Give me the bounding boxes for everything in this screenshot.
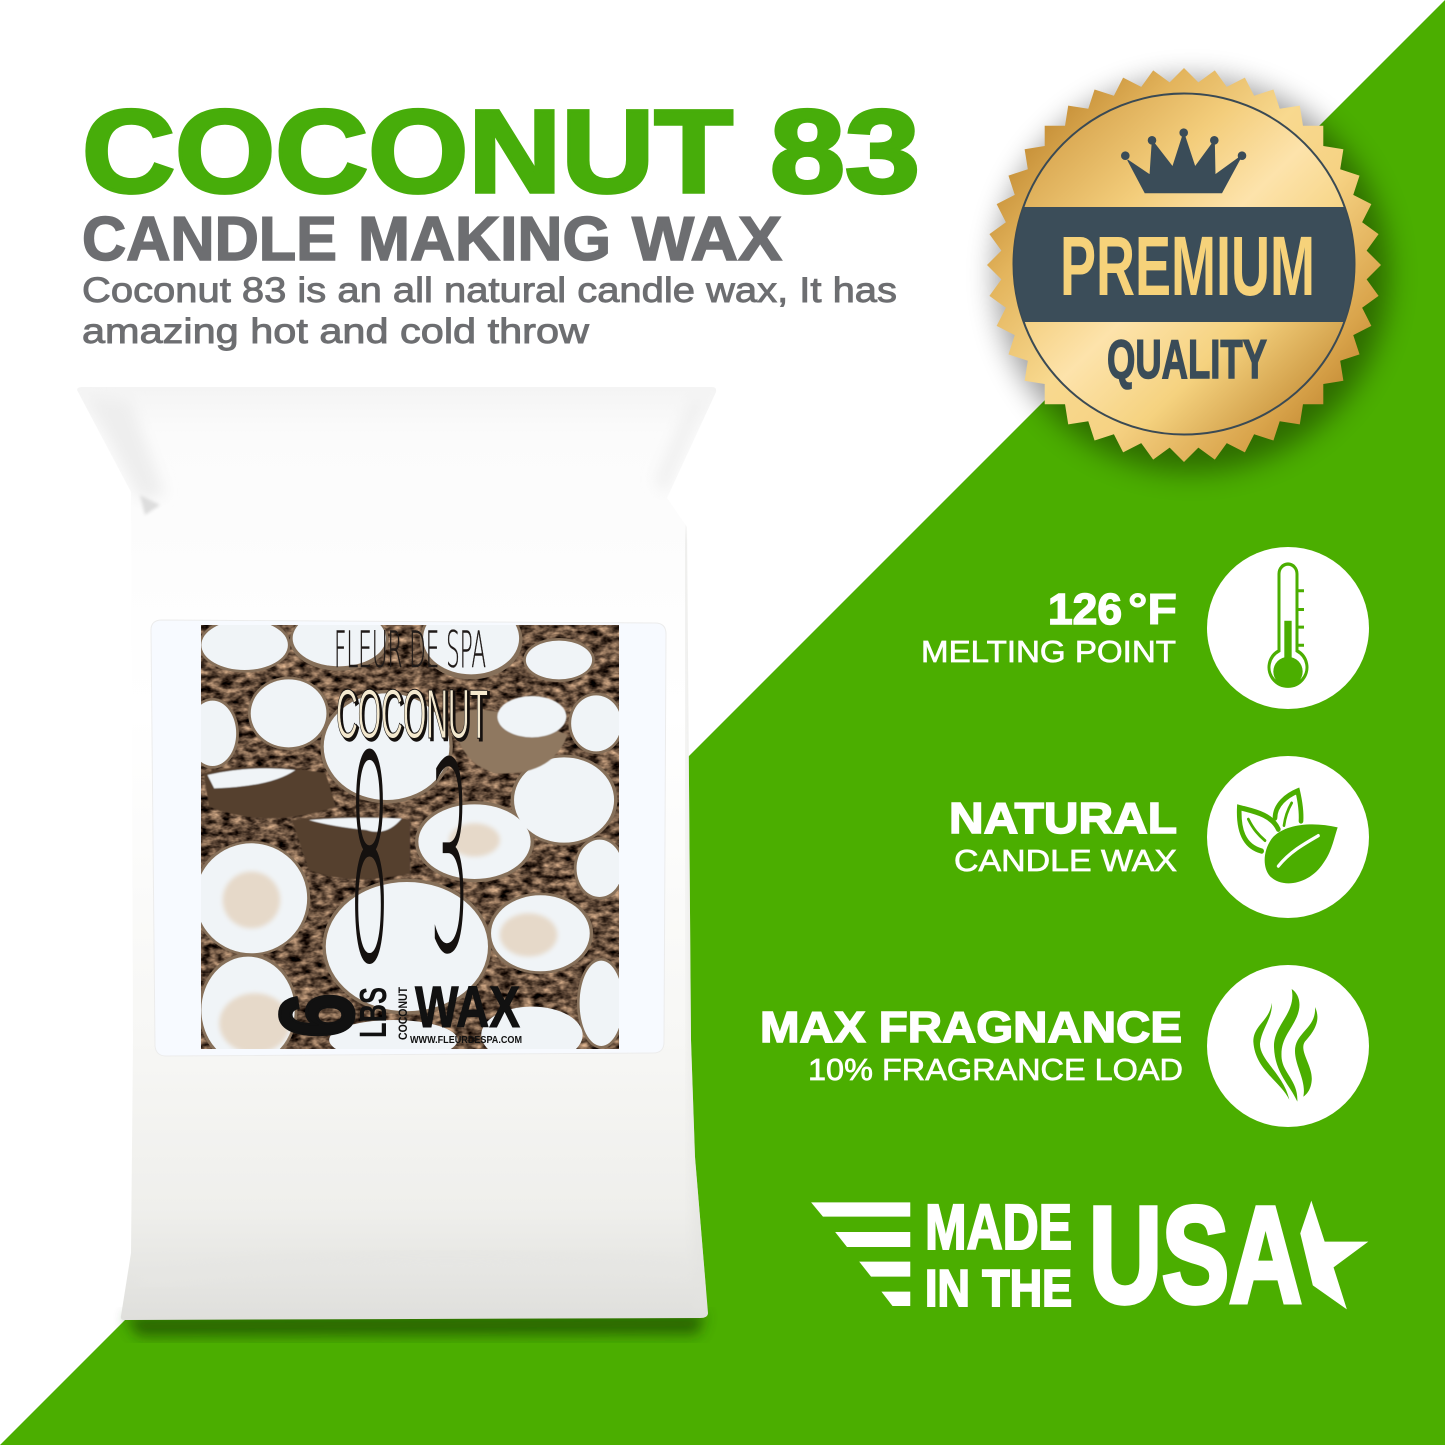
melting point labels: MELTING POINT xyxy=(921,634,1176,669)
subtitle: CANDLE xyxy=(82,205,337,274)
subtitle: WAX xyxy=(632,205,782,274)
melting point labels xyxy=(921,585,1177,669)
label text: 6 lbs coconut wax xyxy=(259,975,522,1046)
usa text: USA xyxy=(1089,1179,1302,1332)
icon: star xyxy=(1300,1201,1368,1309)
melting point labels: 126 xyxy=(1048,585,1122,634)
fragrance labels: 10% FRAGRANCE LOAD xyxy=(808,1052,1183,1087)
premium quality badge xyxy=(979,60,1389,472)
label sheet xyxy=(151,620,666,1056)
subtitle xyxy=(82,205,782,274)
label text: 6 lbs coconut wax: WAX xyxy=(415,975,520,1040)
label text: 83: 8 xyxy=(349,696,390,1028)
description: amazing hot and cold throw xyxy=(82,312,590,351)
badge shadow xyxy=(995,78,1389,472)
product bag xyxy=(77,387,716,1336)
label text: coconut xyxy=(336,675,490,755)
label text: 83 xyxy=(349,696,470,1028)
crown icon xyxy=(1122,129,1246,193)
icon: thermometer xyxy=(1207,547,1369,709)
label text: 6 lbs coconut wax: WWW.FLEURDESPA.COM xyxy=(410,1034,522,1046)
bag body xyxy=(77,387,716,1320)
subtitle: MAKING xyxy=(358,205,611,274)
feature: max fragrance xyxy=(760,965,1369,1127)
icon: wing stripes xyxy=(811,1202,910,1306)
premium text: PREMIUM xyxy=(1060,219,1315,313)
melting point labels: °F xyxy=(1128,585,1177,634)
natural labels xyxy=(949,794,1177,878)
badge inner disc xyxy=(1014,94,1354,434)
product label: 3 xyxy=(430,707,470,1012)
natural labels: CANDLE WAX xyxy=(954,843,1177,878)
title: 83 xyxy=(770,86,920,218)
description: Coconut 83 is an all natural candle wax, It has xyxy=(82,271,897,310)
product label: FLEUR DE SPA xyxy=(334,621,486,679)
natural labels: NATURAL xyxy=(949,794,1177,843)
label text: 6 lbs coconut wax: LBS xyxy=(353,987,395,1038)
made in the usa logo xyxy=(811,1179,1368,1332)
bag fold shading xyxy=(77,390,716,1316)
husk halves xyxy=(204,696,567,879)
coconut photo xyxy=(201,625,619,1049)
label text: 6 lbs coconut wax: COCONUT xyxy=(396,986,410,1040)
made in the text: IN THE xyxy=(925,1260,1072,1318)
bag shadow xyxy=(125,1314,705,1336)
badge dark band xyxy=(1010,207,1360,322)
icon: scent waves xyxy=(1207,965,1369,1127)
label text: 6 lbs coconut wax: 6 xyxy=(259,993,376,1038)
feature: melting point xyxy=(921,547,1369,709)
fragrance labels: MAX FRAGNANCE xyxy=(760,1003,1182,1052)
icon: leaves xyxy=(1207,756,1369,918)
product label: COCONUT xyxy=(336,675,488,753)
made in the text: MADE xyxy=(925,1191,1072,1263)
title: COCONUT xyxy=(82,86,733,218)
product label: COCONUT xyxy=(338,677,490,755)
description xyxy=(82,271,897,351)
fragrance labels xyxy=(760,1003,1183,1087)
quality text: QUALITY xyxy=(1107,328,1267,390)
badge serrated edge xyxy=(979,60,1389,470)
feature: natural wax xyxy=(949,756,1369,918)
product label xyxy=(151,601,666,1067)
made in the text xyxy=(925,1191,1072,1318)
